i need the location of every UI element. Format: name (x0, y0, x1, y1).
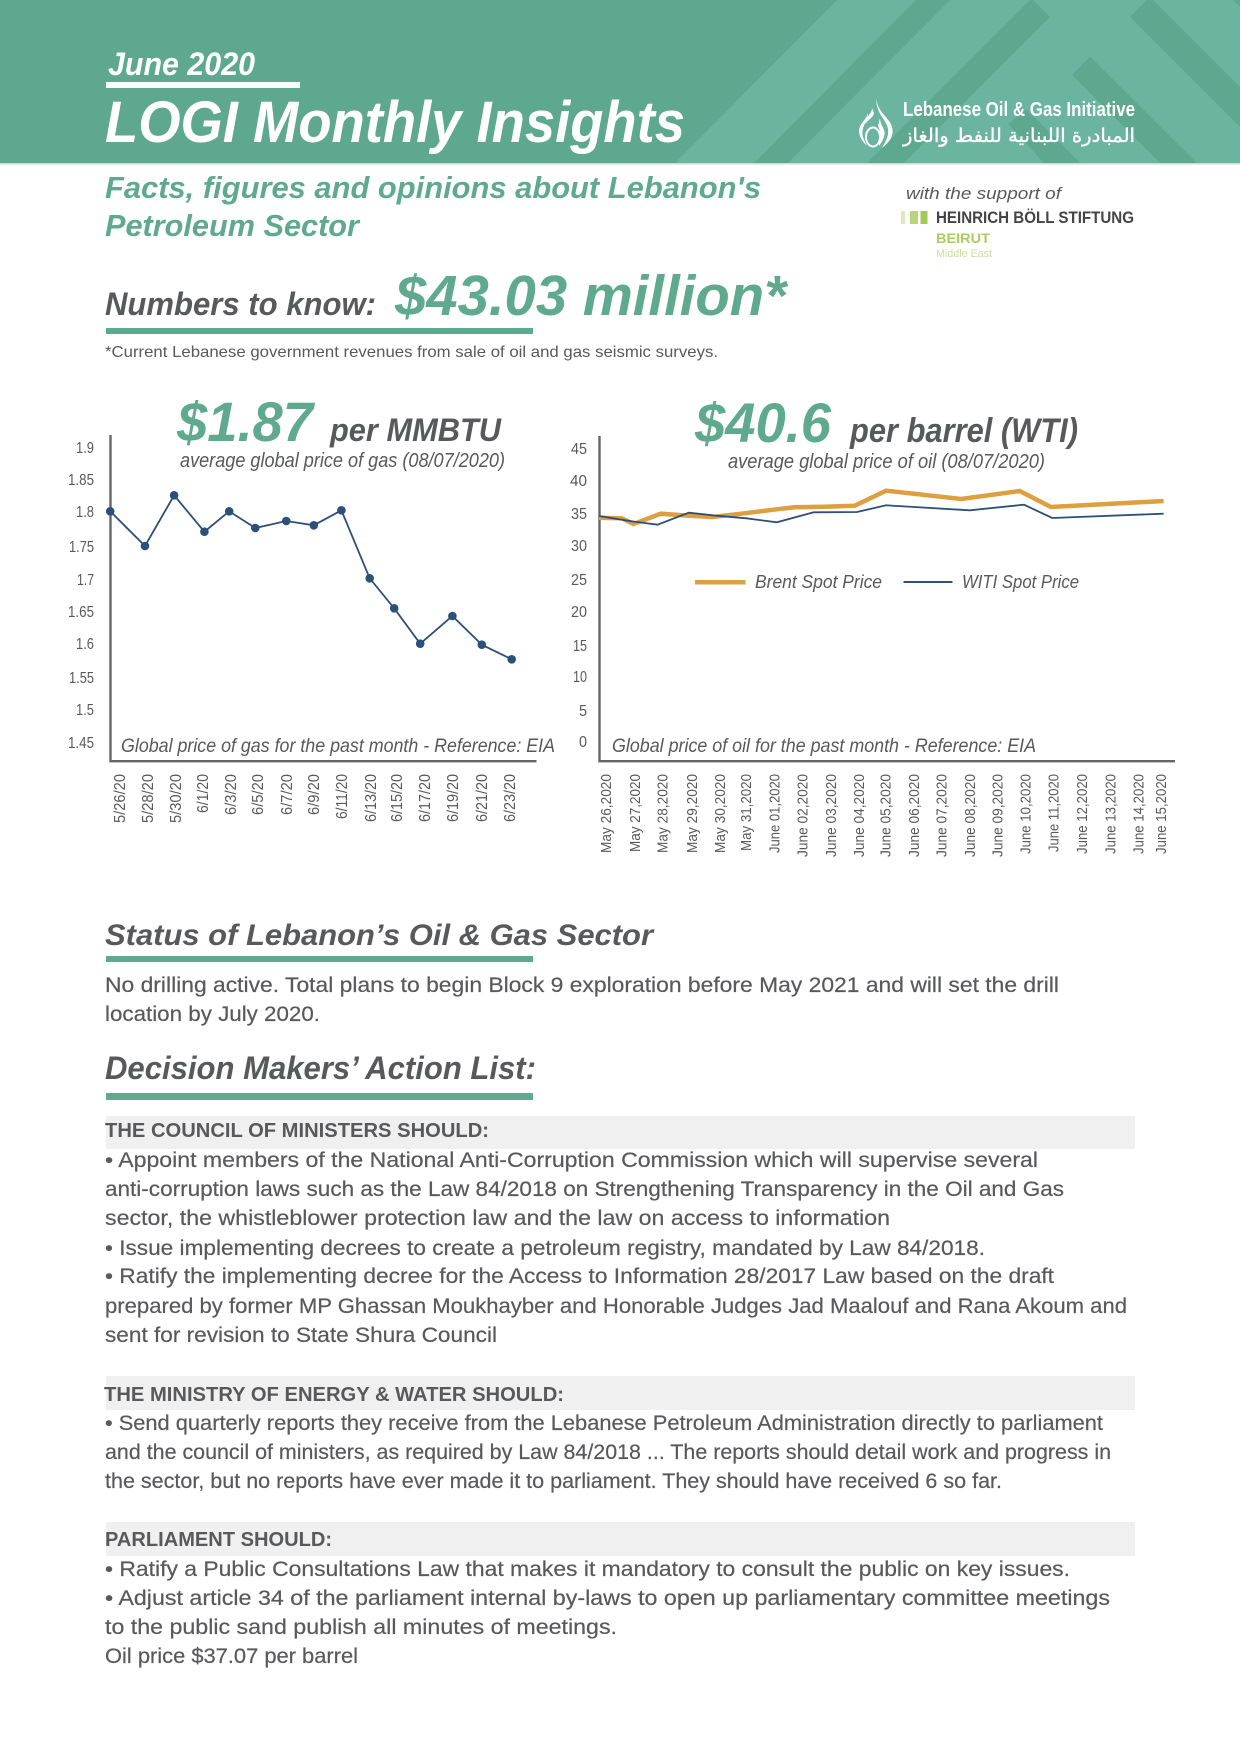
section: status of the sector (105, 919, 1059, 1026)
oil x axis labels (599, 774, 1170, 857)
oil chart legend: Brent Spot Price (755, 572, 882, 592)
gas x axis labels: 5/28/20 (140, 774, 157, 823)
title: LOGI Monthly Insights (105, 90, 685, 155)
oil x axis labels: June 11,2020 (1046, 774, 1062, 852)
gas x axis labels: 6/11/20 (334, 774, 351, 819)
oil x axis labels: May 30,2020 (713, 774, 729, 853)
oil x axis labels: June 13,2020 (1104, 774, 1120, 854)
gas price line (106, 491, 516, 664)
oil x axis labels: June 12,2020 (1075, 774, 1091, 854)
header banner (0, 0, 1240, 164)
panel: council of ministers: prepared by former MP Ghassan Moukhayber and Honorable Judges Jad Maalouf and Rana Akoum and (105, 1295, 1127, 1318)
date label: June 2020: June 2020 (108, 46, 255, 82)
oil x axis labels: June 02,2020 (796, 774, 812, 857)
gas x axis labels: 6/1/20 (195, 774, 212, 813)
gas x axis labels: 6/21/20 (474, 774, 491, 822)
logo: Lebanese Oil and Gas Initiative: المبادرة اللبنانية للنفط والغاز (902, 125, 1135, 147)
status heading: Status of Lebanon’s Oil & Gas Sector (105, 919, 655, 952)
gas x axis labels: 6/23/20 (502, 774, 519, 822)
supporter: Heinrich Boll Stiftung: with the support of (906, 184, 1064, 203)
supporter: Heinrich Boll Stiftung: BEIRUT (936, 231, 991, 246)
gas headline: average global price of gas (08/07/2020) (180, 450, 505, 472)
gas y axis labels: 1.8 (76, 504, 94, 521)
oil y axis labels: 30 (571, 538, 587, 555)
action list underline (106, 1093, 533, 1100)
key number: seismic revenues: Numbers to know: (105, 286, 376, 322)
oil x axis labels: June 08,2020 (963, 774, 979, 857)
logo: Lebanese Oil and Gas Initiative (859, 97, 1135, 148)
panel: parliament (105, 1522, 1135, 1668)
status text (105, 974, 1059, 1026)
status text: No drilling active. Total plans to begin Block 9 exploration before May 2021 and will set the drill (105, 974, 1059, 997)
oil y axis labels: 25 (571, 572, 587, 589)
gas x axis labels: 6/7/20 (279, 774, 296, 815)
oil headline: average global price of oil (08/07/2020) (728, 451, 1045, 473)
gas x axis labels: 6/3/20 (223, 774, 240, 815)
panel: ministry of energy and water: and the council of ministers, as required by Law 84/2018 ... The reports should detail work and progress in (105, 1441, 1111, 1464)
panel: parliament: PARLIAMENT SHOULD: (105, 1529, 332, 1551)
panel: parliament: • Ratify a Public Consultations Law that makes it mandatory to consult the public on key issues. (105, 1558, 1070, 1581)
supporter: Heinrich Boll Stiftung (901, 184, 1134, 260)
oil y axis labels: 20 (571, 604, 587, 621)
status underline (106, 956, 533, 962)
panel: parliament: Oil price $37.07 per barrel (105, 1645, 358, 1668)
gas y axis labels: 1.65 (68, 604, 94, 621)
supporter: Heinrich Boll Stiftung: HEINRICH BÖLL STIFTUNG (936, 208, 1134, 227)
gas x axis labels: 5/30/20 (168, 774, 185, 823)
panel: council of ministers: • Issue implementing decrees to create a petroleum registry, mandated by Law 84/2018. (105, 1237, 985, 1260)
oil x axis labels: May 27,2020 (628, 774, 644, 852)
gas x axis labels: 6/13/20 (363, 774, 380, 822)
gas x axis labels: 6/5/20 (250, 774, 267, 815)
gas y axis labels: 1.9 (76, 440, 94, 457)
gas y axis labels: 1.55 (69, 670, 94, 687)
date underline (106, 82, 300, 88)
panel: ministry of energy and water: the sector, but no reports have ever made it to parliament. They should have received 6 so far. (105, 1470, 1002, 1493)
oil x axis labels: June 14,2020 (1132, 774, 1148, 854)
oil axes (600, 436, 1175, 761)
oil y axis labels (570, 441, 587, 751)
oil y axis labels: 45 (571, 441, 587, 458)
gas y axis labels: 1.7 (77, 572, 94, 589)
oil x axis labels: June 15,2020 (1154, 774, 1170, 854)
line: Brent spot price (599, 491, 1164, 524)
subtitle: Facts, figures and opinions about Lebanon's (105, 170, 761, 205)
gas x axis labels: 6/9/20 (306, 774, 323, 815)
footnote: *Current Lebanese government revenues from sale of oil and gas seismic surveys. (105, 344, 718, 361)
gas y axis labels: 1.6 (76, 636, 94, 653)
panel: council of ministers: anti-corruption laws such as the Law 84/2018 on Strengthening Transparency in the Oil and Gas (105, 1178, 1064, 1201)
oil chart legend: WITI Spot Price (962, 572, 1079, 592)
oil x axis labels: June 01,2020 (768, 774, 784, 853)
logo: Lebanese Oil and Gas Initiative: Lebanese Oil & Gas Initiative (903, 99, 1135, 121)
gas y axis labels: 1.5 (76, 702, 94, 719)
oil headline (694, 391, 1078, 473)
panel: council of ministers: • Ratify the implementing decree for the Access to Information 28/2017 Law based on the draft (105, 1265, 1054, 1288)
gas y axis labels (68, 440, 94, 752)
oil y axis labels: 0 (579, 734, 587, 751)
oil x axis labels: June 05,2020 (878, 774, 894, 857)
gas chart caption: Global price of gas for the past month - Reference: EIA (121, 736, 555, 757)
oil headline: $40.6 (694, 391, 832, 454)
panel: council of ministers: • Appoint members of the National Anti-Corruption Commission which will supervise several (105, 1149, 1038, 1172)
oil chart legend (695, 572, 1079, 592)
line: WTI spot price (599, 505, 1164, 525)
panel: ministry of energy and water: • Send quarterly reports they receive from the Lebanese Petroleum Administration directly to parliament (105, 1412, 1103, 1435)
chart: gas price (68, 390, 555, 823)
oil x axis labels: June 03,2020 (824, 774, 840, 857)
chart: oil price (570, 391, 1175, 857)
gas x axis labels: 5/26/20 (112, 774, 129, 823)
oil y axis labels: 10 (573, 669, 587, 686)
section: decision makers' action list (104, 1050, 1135, 1668)
gas y axis labels: 1.75 (69, 539, 94, 556)
panel: council of ministers: THE COUNCIL OF MINISTERS SHOULD: (105, 1120, 489, 1142)
oil chart caption: Global price of oil for the past month - Reference: EIA (612, 736, 1036, 757)
panel: parliament: to the public sand publish all minutes of meetings. (105, 1616, 617, 1639)
oil x axis labels: May 31,2020 (739, 774, 755, 851)
gas x axis labels: 6/15/20 (389, 774, 406, 822)
key number: seismic revenues (105, 264, 789, 334)
panel: council of ministers: sector, the whistleblower protection law and the law on access to information (105, 1207, 890, 1230)
gas axes (110, 435, 536, 761)
subtitle (105, 170, 761, 243)
oil headline: per barrel (WTI) (849, 412, 1078, 450)
oil x axis labels: June 04,2020 (852, 774, 868, 857)
gas y axis labels: 1.45 (68, 735, 94, 752)
gas y axis labels: 1.85 (68, 472, 94, 489)
subtitle: Petroleum Sector (105, 208, 361, 243)
oil y axis labels: 15 (573, 638, 587, 655)
panel: ministry of energy and water: THE MINISTRY OF ENERGY & WATER SHOULD: (104, 1384, 564, 1406)
gas x axis labels: 6/17/20 (417, 774, 434, 822)
panel: council of ministers: sent for revision to State Shura Council (105, 1324, 497, 1347)
status text: location by July 2020. (105, 1003, 320, 1026)
supporter: Heinrich Boll Stiftung: Middle East (936, 248, 992, 260)
gas x axis labels: 6/19/20 (445, 774, 462, 822)
oil y axis labels: 35 (571, 506, 587, 523)
panel: council of ministers (105, 1116, 1135, 1347)
gas headline: per MMBTU (329, 412, 502, 448)
oil x axis labels: June 06,2020 (907, 774, 923, 857)
oil x axis labels: May 28,2020 (656, 774, 672, 853)
oil x axis labels: June 09,2020 (990, 774, 1006, 857)
oil x axis labels: May 29,2020 (685, 774, 701, 853)
key number: seismic revenues: $43.03 million* (394, 264, 789, 328)
gas x axis labels (112, 774, 519, 823)
gas headline: $1.87 (176, 390, 316, 453)
oil x axis labels: May 26,2020 (599, 774, 615, 853)
panel: ministry of energy and water (104, 1376, 1135, 1493)
oil x axis labels: June 07,2020 (934, 774, 950, 857)
gas headline (176, 390, 505, 472)
panel: parliament: • Adjust article 34 of the parliament internal by-laws to open up parliamentary committee meetings (105, 1587, 1110, 1610)
oil x axis labels: June 10,2020 (1018, 774, 1034, 854)
action list heading: Decision Makers’ Action List: (105, 1050, 536, 1086)
oil y axis labels: 5 (579, 703, 587, 720)
oil y axis labels: 40 (570, 473, 587, 490)
icon: flame (859, 97, 893, 148)
